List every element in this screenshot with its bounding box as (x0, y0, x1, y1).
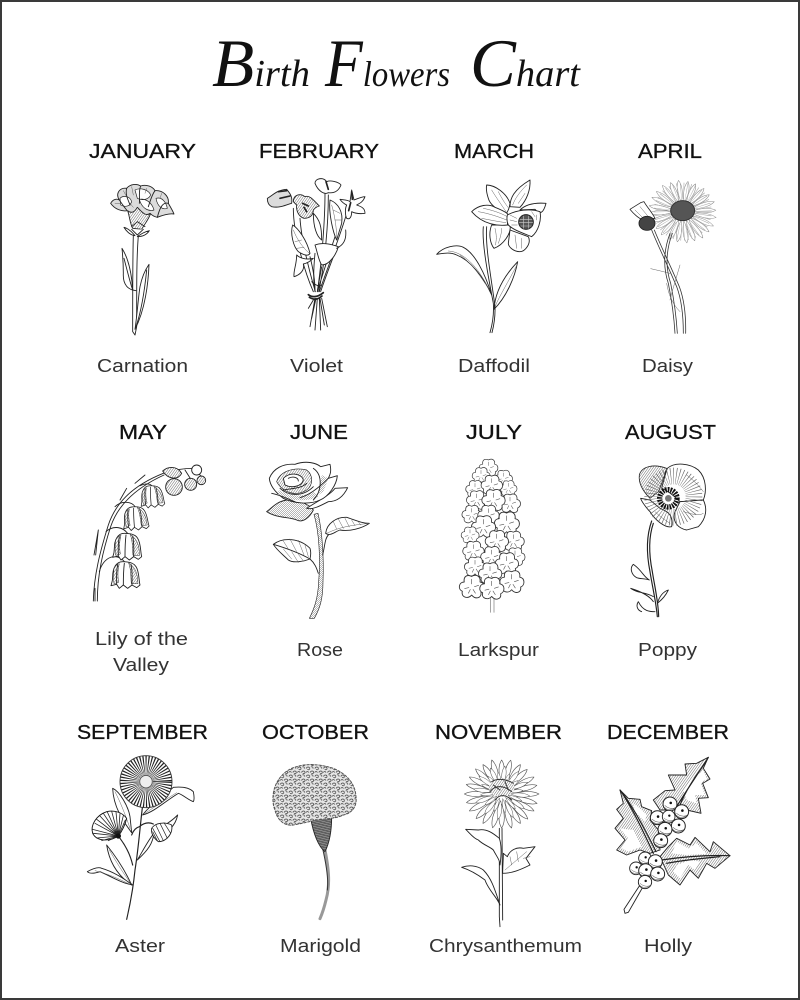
flower name: Poppy (638, 639, 698, 660)
month heading: JANUARY (89, 140, 196, 163)
icon: poppy (631, 464, 706, 617)
icon: larkspur (459, 459, 525, 612)
flower name: Daisy (642, 355, 694, 376)
panel: March (437, 140, 546, 376)
flower name: Marigold (280, 935, 361, 956)
flower name: Larkspur (458, 639, 539, 660)
panel: February (259, 140, 379, 376)
month heading: NOVEMBER (435, 721, 562, 744)
icon: daffodil (437, 180, 546, 333)
month heading: APRIL (638, 140, 702, 163)
month heading: JULY (466, 421, 522, 444)
panel: October (262, 721, 369, 956)
icon: marigold (273, 765, 356, 919)
flower name: Lily of the (95, 628, 188, 649)
icon: rose (267, 462, 369, 618)
flower name: Aster (115, 935, 165, 956)
flower name: Rose (297, 639, 343, 660)
flower name: Holly (644, 935, 693, 956)
title: Chart (470, 25, 581, 101)
panel: May (93, 421, 206, 675)
icon: lily of the valley (93, 465, 206, 601)
month heading: SEPTEMBER (77, 721, 208, 744)
icon: carnation (111, 184, 174, 335)
month heading: JUNE (290, 421, 348, 444)
icon: violet (267, 179, 365, 330)
title: Flowers (324, 25, 450, 101)
month heading: AUGUST (625, 421, 716, 444)
flower name: Daffodil (458, 355, 530, 376)
panel: April (630, 140, 726, 376)
month heading: DECEMBER (607, 721, 729, 744)
icon: chrysanthemum (457, 751, 546, 927)
month heading: FEBRUARY (259, 140, 379, 163)
icon: daisy (630, 170, 726, 333)
panel: August (625, 421, 716, 660)
title (212, 25, 581, 101)
flower name: Violet (290, 355, 343, 376)
icon: aster (87, 756, 194, 919)
month heading: MARCH (454, 140, 534, 163)
panel: December (607, 721, 730, 956)
panel: June (267, 421, 369, 660)
panel: November (429, 721, 582, 956)
flower name: Chrysanthemum (429, 935, 582, 956)
panel: July (458, 421, 539, 660)
panel: September (77, 721, 208, 956)
panel: January (89, 140, 196, 376)
title: Birth (212, 25, 310, 101)
month heading: OCTOBER (262, 721, 369, 744)
flower name: Carnation (97, 355, 188, 376)
icon: holly (615, 757, 730, 913)
flower name, second line: Valley (113, 654, 170, 675)
month heading: MAY (119, 421, 167, 444)
